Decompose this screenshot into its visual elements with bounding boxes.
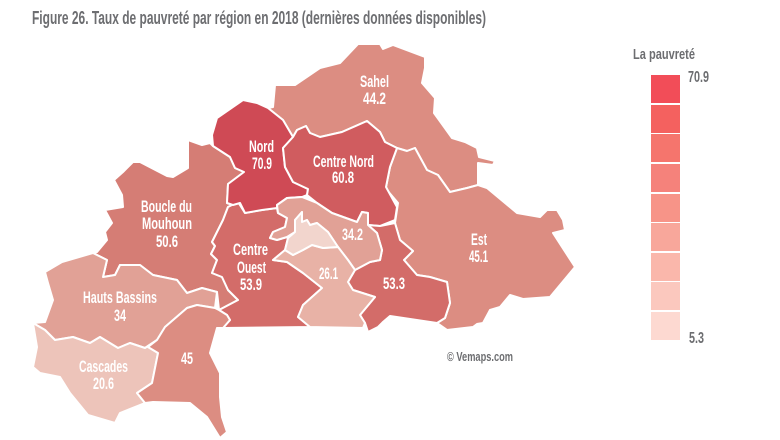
region: Sahel: Sahel xyxy=(360,73,389,91)
legend colour scale xyxy=(651,75,680,340)
legend maximum: 70.9 xyxy=(688,69,709,86)
region: Sahel xyxy=(268,44,495,192)
region: Centre Ouest xyxy=(211,202,322,328)
region: Centre Nord: Centre Nord xyxy=(313,153,374,171)
region: Est: Est xyxy=(471,231,487,249)
region: Sud-Ouest: 45 xyxy=(181,350,193,368)
region: Centre Sud xyxy=(273,245,375,328)
legend xyxy=(633,46,709,347)
region: Centre Ouest: Centre xyxy=(233,241,268,259)
region: Centre Est xyxy=(348,223,450,332)
region: Hauts Bassins: Hauts Bassins xyxy=(83,289,157,307)
region: Centre Sud: 26.1 xyxy=(319,265,338,283)
map of regions xyxy=(33,44,575,438)
region: Nord xyxy=(212,100,308,213)
region: Cascades: 20.6 xyxy=(93,375,114,393)
legend title: La pauvreté xyxy=(633,46,695,63)
region: Plateau Central xyxy=(270,197,382,270)
region: Centre Ouest: 53.9 xyxy=(240,276,262,294)
region: Est: 45.1 xyxy=(469,248,488,266)
region: Nord: Nord xyxy=(249,138,274,156)
region: Est xyxy=(386,148,575,330)
region: Centre Est: 53.3 xyxy=(383,275,405,293)
region: Cascades: Cascades xyxy=(79,358,128,376)
map credit: © Vemaps.com xyxy=(447,349,513,364)
region: Boucle du Mouhoun xyxy=(93,140,244,310)
region: Cascades xyxy=(33,323,158,423)
region: Centre Nord xyxy=(283,121,397,226)
region: Boucle du Mouhoun: Boucle du xyxy=(141,198,192,216)
region: Plateau Central: 34.2 xyxy=(342,226,363,244)
region: Hauts Bassins xyxy=(33,253,217,348)
region: Centre Nord: 60.8 xyxy=(332,169,354,187)
region: Hauts Bassins: 34 xyxy=(114,307,127,325)
region: Boucle du Mouhoun: Mouhoun xyxy=(142,215,192,233)
region: Sahel: 44.2 xyxy=(363,90,386,108)
region: Sud-Ouest xyxy=(137,305,230,438)
region: Nord: 70.9 xyxy=(252,155,272,173)
region: Centre xyxy=(285,212,338,255)
title: Figure 26. Taux de pauvreté par région en 2018 (dernières données disponibles) xyxy=(32,8,486,28)
region: Boucle du Mouhoun: 50.6 xyxy=(156,233,178,251)
region: Centre Ouest: Ouest xyxy=(237,259,266,277)
legend minimum: 5.3 xyxy=(689,330,704,347)
